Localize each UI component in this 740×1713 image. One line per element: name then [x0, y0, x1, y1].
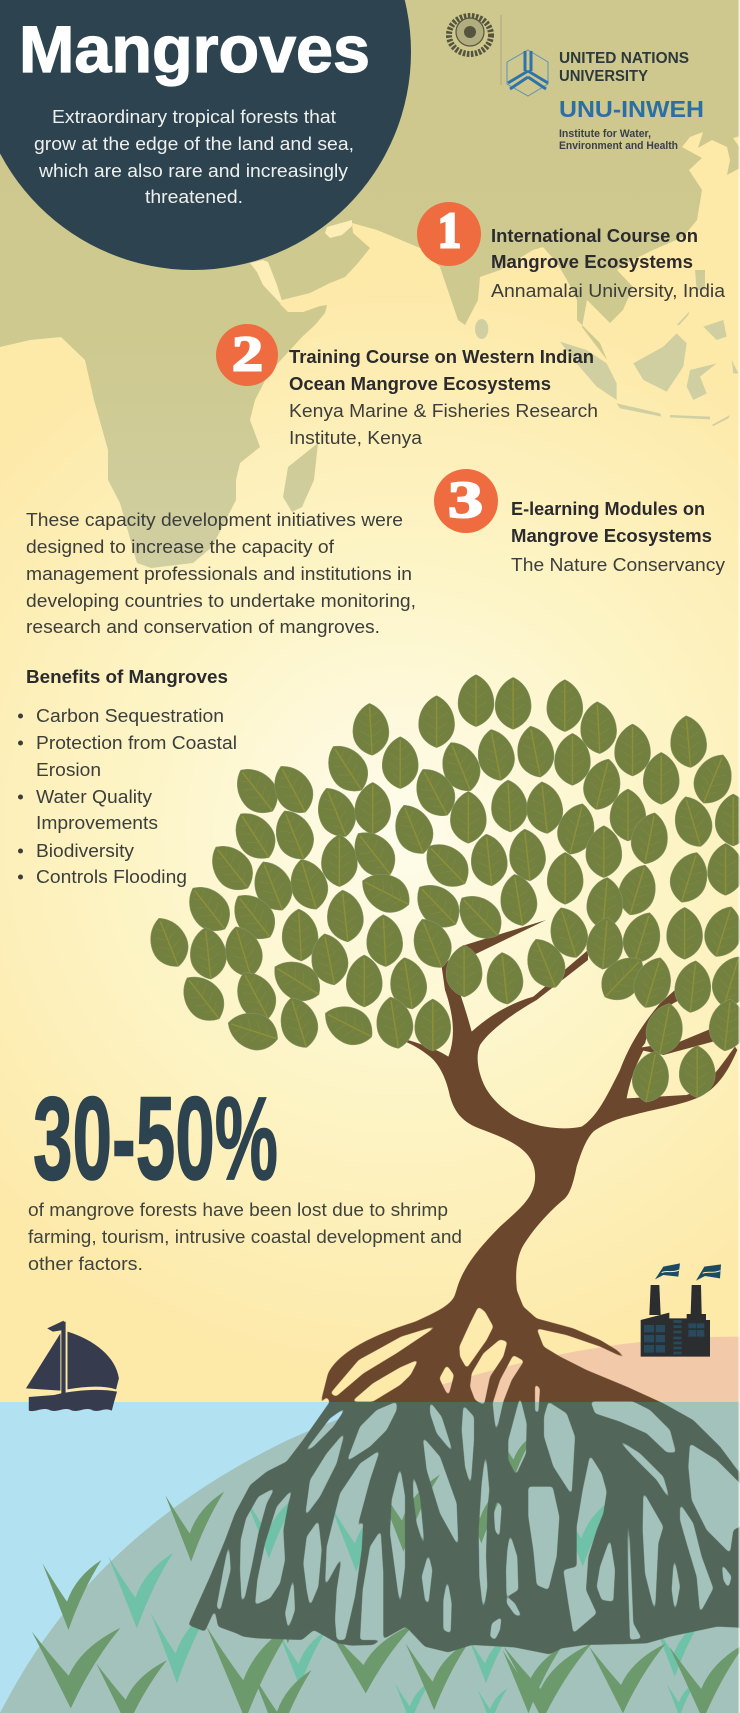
Red Sea cut — [250, 260, 282, 303]
benefits list — [18, 706, 237, 887]
capacity paragraph: These capacity development initiatives were — [26, 510, 403, 530]
benefits list: Erosion — [36, 760, 101, 780]
benefits list: Improvements — [36, 813, 158, 833]
logo text: UNIVERSITY — [559, 68, 648, 85]
water — [0, 1402, 740, 1713]
course 2 text: Ocean Mangrove Ecosystems — [289, 374, 551, 394]
intro text: grow at the edge of the land and sea, — [34, 134, 354, 154]
logo: UNU hexagon — [507, 50, 548, 96]
salmon shore mound — [0, 1337, 740, 1713]
statistic caption: farming, tourism, intrusive coastal development and — [28, 1227, 462, 1247]
course 1 text — [491, 226, 726, 301]
Sumatra — [560, 342, 617, 400]
course 1 text: Mangrove Ecosystems — [491, 252, 693, 272]
icon: sailboat — [26, 1321, 119, 1411]
benefits list: Carbon Sequestration — [36, 706, 224, 726]
Lesser Sunda — [670, 415, 710, 419]
logo text: Institute for Water, — [559, 128, 651, 140]
Java — [617, 403, 662, 417]
benefits list: Protection from Coastal — [36, 733, 237, 753]
benefits heading: Benefits of Mangroves — [26, 667, 228, 687]
logo divider — [500, 15, 502, 85]
capacity paragraph: developing countries to undertake monitoring, — [26, 591, 416, 611]
Madagascar — [283, 443, 318, 512]
statistic caption — [28, 1200, 462, 1274]
title: Mangroves — [19, 12, 370, 86]
Palawan — [677, 312, 689, 325]
Mindanao — [703, 320, 727, 340]
logo: UN emblem — [449, 16, 491, 54]
course 1 text: Annamalai University, India — [491, 281, 726, 301]
logo text — [559, 50, 704, 152]
land mass: Eurasia and Africa — [0, 0, 740, 568]
Persian Gulf cut — [325, 220, 352, 238]
benefits list: Controls Flooding — [36, 867, 187, 887]
Borneo — [633, 333, 687, 392]
course 2 text: Kenya Marine & Fisheries Research — [289, 401, 598, 421]
intro text: Extraordinary tropical forests that — [52, 107, 336, 127]
Timor — [712, 415, 730, 426]
big statistic: 30-50% — [33, 1073, 278, 1205]
intro text: which are also rare and increasingly — [38, 161, 348, 181]
capacity paragraph — [26, 510, 416, 637]
world map — [0, 0, 740, 568]
badge 2 — [216, 324, 278, 386]
logo text: Environment and Health — [559, 140, 678, 152]
underwater hill — [0, 1402, 740, 1713]
course 2 text — [289, 347, 598, 448]
intro text: threatened. — [145, 187, 243, 207]
course 2 text: Training Course on Western Indian — [289, 347, 594, 367]
course 2 text: Institute, Kenya — [289, 428, 423, 448]
benefits list: Water Quality — [36, 787, 152, 807]
benefits list: Biodiversity — [36, 841, 134, 861]
badge 2: 2 — [232, 325, 263, 381]
statistic caption: other factors. — [28, 1254, 143, 1274]
mangrove roots — [189, 1283, 740, 1654]
seagrass — [32, 1435, 740, 1713]
Sulawesi — [687, 363, 717, 400]
tree trunk and branches — [390, 920, 740, 1300]
logo text: UNITED NATIONS — [559, 50, 689, 67]
capacity paragraph: research and conservation of mangroves. — [26, 617, 380, 637]
capacity paragraph: management professionals and institutions in — [26, 564, 412, 584]
New Guinea edge — [732, 360, 738, 373]
course 1 text: International Course on — [491, 226, 698, 246]
Philippines — [695, 270, 705, 290]
course 3 text: E-learning Modules on — [511, 499, 705, 519]
tree canopy leaves — [142, 675, 740, 1106]
statistic caption: of mangrove forests have been lost due to shrimp — [28, 1200, 448, 1220]
logo text: UNU-INWEH — [559, 96, 704, 122]
badge 1: 1 — [438, 202, 461, 258]
badge 3: 3 — [448, 472, 483, 529]
course 3 text: The Nature Conservancy — [511, 555, 725, 575]
badge 1 — [417, 202, 481, 266]
icon: factory — [641, 1263, 721, 1357]
course 3 text — [511, 499, 725, 575]
Sri Lanka — [475, 319, 488, 339]
course 3 text: Mangrove Ecosystems — [511, 526, 712, 546]
capacity paragraph: designed to increase the capacity of — [26, 537, 335, 557]
right edge strip — [738, 0, 740, 1713]
badge 3 — [434, 469, 498, 533]
intro text — [34, 107, 354, 207]
title circle — [0, 0, 411, 270]
